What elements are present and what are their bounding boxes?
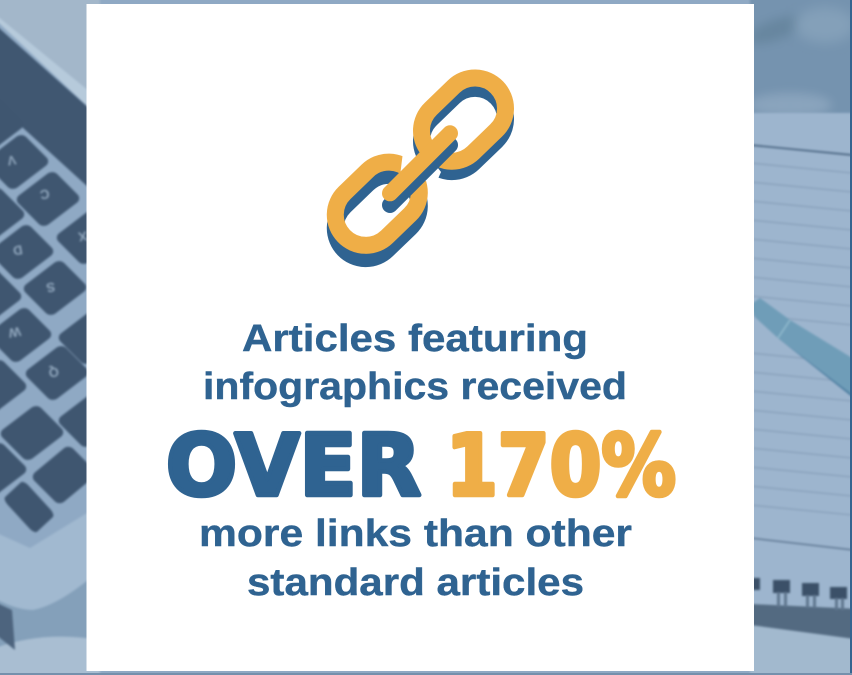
- big stat: over 170%: 170%: [446, 417, 676, 516]
- big stat: over 170%: OVER: [166, 417, 421, 516]
- notebook: [750, 113, 852, 675]
- icon: chain link: [323, 65, 518, 271]
- laptop keyboard: X: [77, 228, 88, 245]
- big stat: over 170%: [166, 417, 676, 516]
- spiral binding: [750, 578, 852, 640]
- laptop keyboard: Q: [47, 364, 60, 381]
- heading text: infographics received: [203, 366, 627, 408]
- laptop keyboard: V: [6, 152, 17, 169]
- laptop keyboard: [0, 0, 124, 675]
- closing text: standard articles: [247, 562, 584, 604]
- cloth: [745, 0, 852, 117]
- closing text: more links than other: [199, 513, 632, 555]
- white center panel: [86, 4, 754, 671]
- closing text: [199, 513, 632, 604]
- laptop keyboard: D: [12, 242, 24, 259]
- laptop keyboard: C: [38, 186, 51, 203]
- pen: [750, 298, 852, 405]
- heading text: [203, 318, 627, 408]
- laptop keyboard: W: [7, 324, 22, 341]
- laptop keyboard: S: [45, 279, 56, 296]
- heading text: Articles featuring: [242, 318, 588, 360]
